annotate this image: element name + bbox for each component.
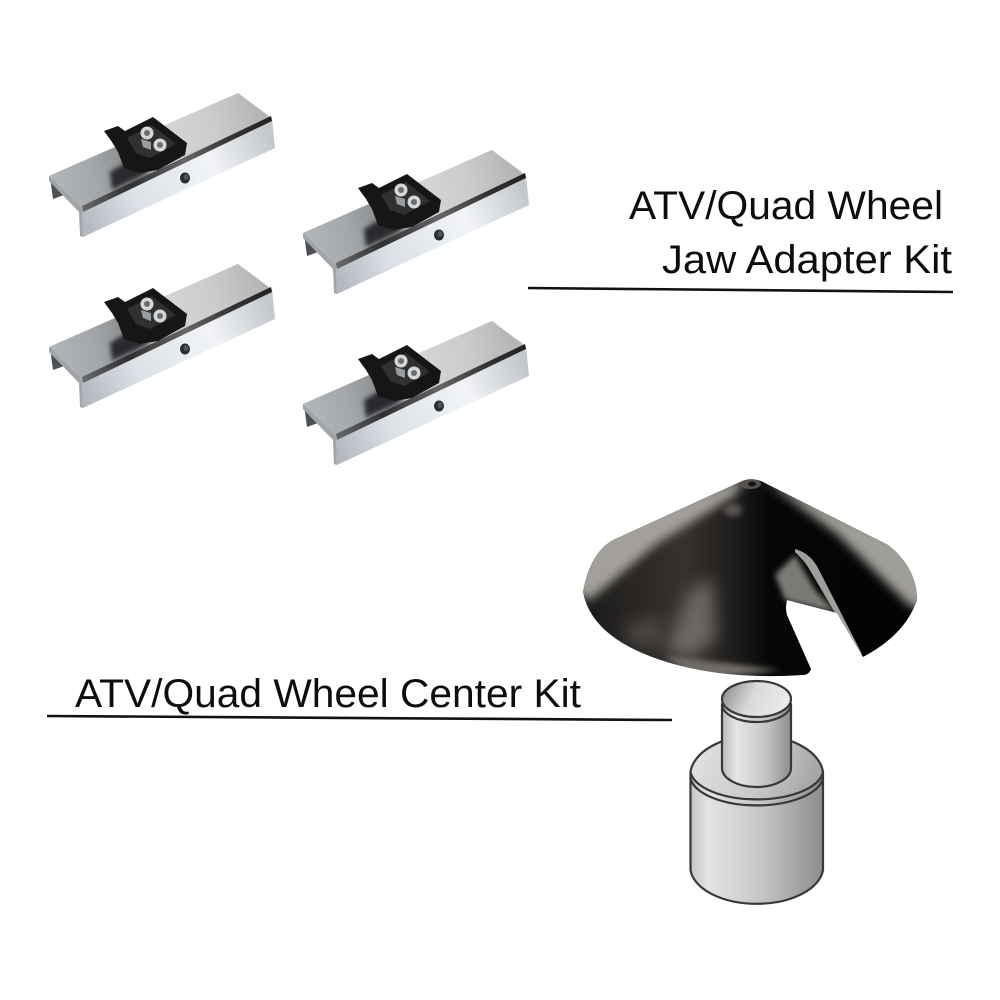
icon: black cone xyxy=(583,479,917,676)
leader line: jaw adapter kit xyxy=(528,288,953,292)
heading: jaw adapter kit xyxy=(629,184,952,282)
heading: jaw adapter kit: Jaw Adapter Kit xyxy=(662,238,952,282)
heading: center kit: ATV/Quad Wheel Center Kit xyxy=(75,672,581,716)
jaw adapter bracket 1 xyxy=(49,93,275,237)
jaw adapter bracket 3 xyxy=(49,264,275,408)
leader line: center kit xyxy=(47,716,672,720)
heading: jaw adapter kit: ATV/Quad Wheel xyxy=(629,184,943,228)
jaw adapter bracket 4 xyxy=(303,321,529,465)
icon: stepped cylinder xyxy=(690,681,823,904)
jaw adapter bracket 2 xyxy=(303,150,529,294)
